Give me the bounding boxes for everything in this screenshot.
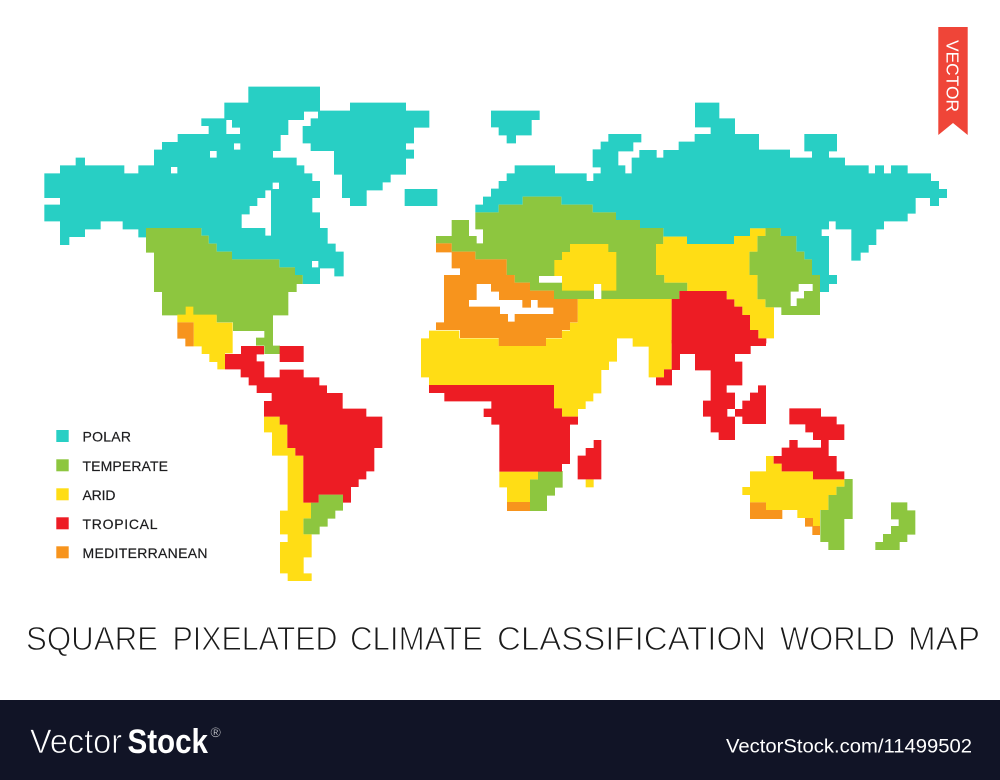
tropical: Caribbean — [280, 346, 304, 362]
Caspian Sea — [539, 276, 562, 283]
mediterranean: southwest Australia — [750, 502, 782, 519]
title: PIXELATED — [172, 621, 338, 658]
title: CLASSIFICATION — [497, 621, 766, 658]
polar: Svalbard — [491, 111, 540, 143]
temperate: eastern Australia — [820, 479, 853, 550]
mediterranean: South Africa — [507, 502, 530, 511]
VectorStock logo: Stock — [128, 723, 208, 761]
title: SQUARE — [26, 621, 158, 658]
arid: Madagascar tip — [586, 479, 594, 487]
VectorStock logo — [30, 723, 208, 761]
ribbon label: VECTOR — [942, 40, 962, 112]
tropical: Southeast Asia — [656, 340, 766, 440]
mediterranean: Mexico — [177, 322, 194, 346]
legend item: temperate: TEMPERATE — [82, 458, 168, 474]
arid: Mongolia and China — [656, 228, 774, 338]
polar: Eurasia — [475, 103, 947, 292]
temperate: North America — [146, 228, 303, 354]
legend item: tropical: TROPICAL — [82, 516, 158, 532]
legend item: arid: ARID — [82, 487, 116, 503]
polar: North America — [44, 87, 344, 284]
arid: Central Asia — [554, 244, 616, 291]
tropical: New Guinea and northern Australia — [774, 408, 844, 479]
footer background — [0, 700, 1000, 780]
legend item: arid — [56, 487, 116, 503]
mediterranean: Europe and North Africa — [436, 243, 578, 346]
title — [26, 621, 980, 658]
title: WORLD — [780, 621, 895, 658]
legend — [56, 429, 207, 561]
legend item: polar — [56, 429, 131, 445]
tropical: India — [672, 291, 766, 343]
footer bar — [0, 700, 1000, 780]
temperate: Europe and Central Asia — [436, 197, 687, 299]
title: MAP — [908, 621, 980, 658]
tropical: Africa — [429, 385, 578, 472]
arid: Andes — [264, 417, 312, 581]
polar: Greenland — [303, 103, 429, 206]
tropical: Central and South America — [225, 346, 382, 503]
world map — [44, 87, 947, 581]
arid: Sahara and Arabia — [421, 299, 672, 417]
arid: Mexico — [177, 307, 233, 369]
registered mark: ® — [210, 724, 222, 740]
tropical: Madagascar — [578, 440, 601, 479]
temperate: southern Africa — [530, 471, 563, 511]
image id: VectorStock.com/11499502 — [726, 736, 972, 758]
temperate: South America — [303, 495, 343, 534]
title: CLIMATE — [350, 621, 483, 658]
tropical: Borneo — [735, 385, 766, 424]
arid: southern Africa — [499, 472, 538, 502]
arid: Australia — [742, 456, 844, 526]
polar: Iceland — [405, 189, 437, 206]
ribbon badge — [938, 27, 968, 135]
mediterranean: southeast Australia — [805, 518, 820, 535]
temperate: New Zealand — [875, 502, 915, 550]
ribbon shape — [938, 27, 968, 135]
VectorStock logo: Vector — [30, 723, 122, 761]
legend item: mediterranean: MEDITERRANEAN — [82, 545, 208, 561]
temperate: East Asia — [749, 228, 820, 315]
legend item: polar: POLAR — [82, 429, 131, 445]
